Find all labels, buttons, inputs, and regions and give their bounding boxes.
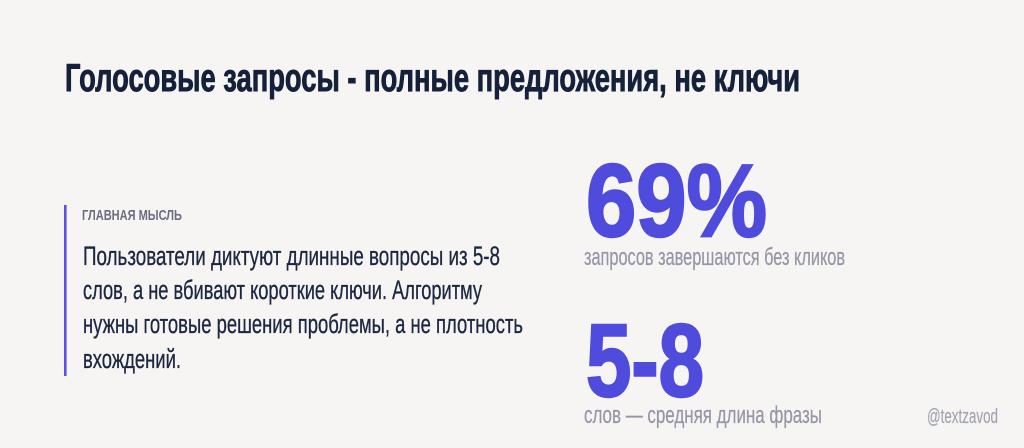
stat value: 5-8 xyxy=(586,303,704,418)
main idea text: слов, а не вбивают короткие ключи. Алгоритму xyxy=(83,275,482,305)
main idea text: Пользователи диктуют длинные вопросы из 5-8 xyxy=(83,241,500,271)
stat: 69 percent xyxy=(584,143,845,271)
stat: 5-8 words xyxy=(584,303,822,429)
main idea text: нужны готовые решения проблемы, а не плотность xyxy=(83,309,523,339)
main idea label: ГЛАВНАЯ МЫСЛЬ xyxy=(82,207,182,224)
stat caption: запросов завершаются без кликов xyxy=(584,244,845,271)
stat caption: слов — средняя длина фразы xyxy=(584,402,822,429)
main idea text xyxy=(83,241,523,374)
main idea text: вхождений. xyxy=(83,344,181,374)
accent bar xyxy=(64,205,67,376)
panel: main idea xyxy=(64,205,523,376)
stat value: 69% xyxy=(586,143,767,258)
